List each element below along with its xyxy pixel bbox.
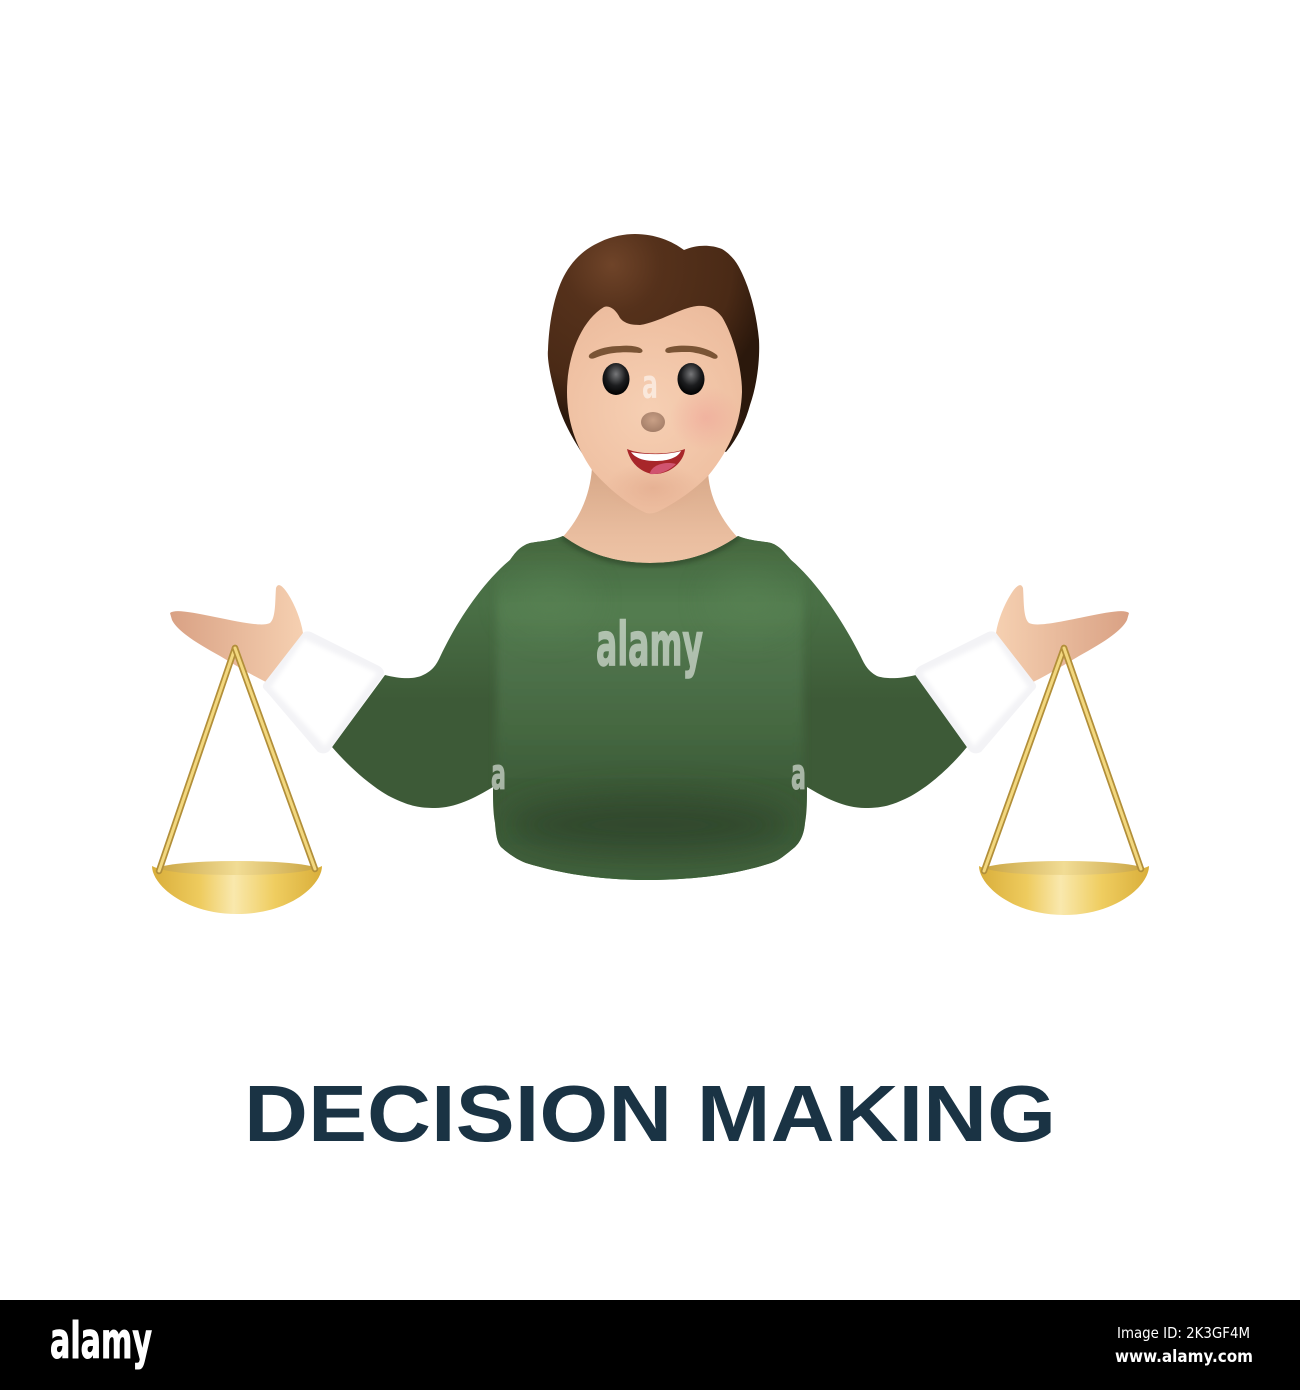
right balance scale bbox=[979, 648, 1149, 915]
sleeves base bbox=[320, 530, 980, 890]
center watermark: alamy bbox=[596, 610, 703, 680]
left pan bowl bbox=[152, 866, 322, 914]
left hand bbox=[170, 585, 303, 684]
neckline shadow bbox=[563, 536, 738, 563]
small watermark marks: a bbox=[491, 750, 506, 800]
neck bbox=[558, 468, 742, 580]
website: www.alamy.com bbox=[1115, 1347, 1253, 1367]
face bbox=[567, 306, 742, 514]
left cuff bbox=[263, 631, 384, 753]
left eyebrow bbox=[589, 346, 643, 359]
nose bbox=[641, 412, 665, 432]
title: DECISION MAKING bbox=[244, 1069, 1056, 1158]
chin shading bbox=[605, 462, 701, 514]
small watermark marks: a bbox=[791, 750, 806, 800]
teeth bbox=[631, 451, 681, 461]
left pan inner rim bbox=[155, 861, 319, 879]
green sweater bbox=[332, 536, 967, 880]
image id: Image ID: 2K3GF4M bbox=[1117, 1324, 1250, 1342]
right hand bbox=[996, 585, 1129, 684]
tongue bbox=[650, 463, 676, 474]
small watermark marks: a bbox=[642, 362, 658, 408]
left balance scale bbox=[152, 648, 322, 914]
mouth bbox=[627, 449, 685, 474]
right eye bbox=[678, 363, 704, 395]
right pan inner rim bbox=[982, 861, 1146, 879]
right cuff bbox=[915, 631, 1036, 753]
footer bar bbox=[0, 1300, 1300, 1390]
small watermark marks bbox=[491, 362, 806, 800]
right eyebrow bbox=[665, 346, 718, 359]
left scale cords bbox=[159, 648, 315, 871]
shoulder highlights bbox=[510, 570, 590, 630]
character illustration bbox=[170, 234, 1129, 910]
left eye bbox=[602, 363, 630, 395]
hair bbox=[548, 234, 759, 456]
dark lower belly shade bbox=[505, 795, 795, 855]
right cheek blush bbox=[670, 386, 742, 450]
footer logo: alamy bbox=[50, 1312, 152, 1370]
body panel bbox=[494, 536, 806, 880]
right pan bowl bbox=[979, 866, 1149, 915]
right scale cords bbox=[984, 648, 1141, 871]
